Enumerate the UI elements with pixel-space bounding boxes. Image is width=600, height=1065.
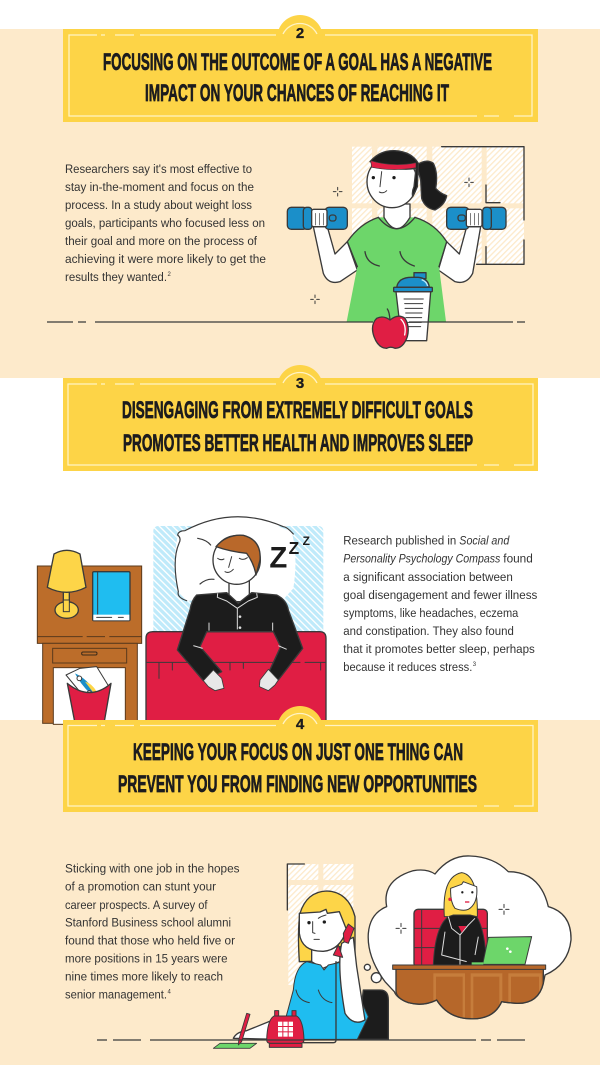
text block: section 2: their goal and more on the process of [65,234,258,248]
red executive chair [414,909,487,968]
sparkles [311,178,473,304]
right hand [466,209,482,227]
text block: section 4 [65,862,240,1002]
executive features [448,891,473,902]
phone cord [303,962,336,1043]
executive hair [444,873,477,917]
right arm [438,227,481,282]
illustration: woman on phone imagining a promotion [213,856,571,1048]
sleeping face [218,557,247,572]
blanket [146,632,326,721]
blue shirt [280,962,368,1039]
window frame [442,147,524,264]
nightstand top [37,566,142,643]
number 3: 3 [296,375,304,392]
text block: section 4: nine times more likely to reach [65,970,223,984]
executive face [451,882,477,910]
text block: section 2 [65,162,266,284]
ponytail [417,161,447,210]
illustration: woman lifting dumbbells [287,147,524,348]
executive jacket [433,915,487,965]
head [213,536,260,584]
pajama collar and details [193,593,287,649]
red telephone [267,1011,304,1047]
face [299,909,347,951]
text block: section 2: Researchers say it's most effective to [65,162,252,176]
text block: section 3: Personality Psychology Compass [343,552,500,566]
text block: section 4: 4 [168,990,172,996]
heading text [103,49,492,107]
neck [229,578,249,602]
text block: section 3: Social and [459,534,510,548]
text block: section 4: found that those who held five or [65,934,235,948]
neck [312,947,340,968]
laptop [472,937,532,965]
text block: section 4: career prospects. A survey of [65,898,208,912]
writing arm [233,1017,279,1039]
text block: section 2: process. In a study about weight loss [65,198,252,212]
text block: section 3: and constipation. They also found [343,624,514,638]
banner: heading 2 [63,15,538,122]
face [372,172,396,193]
green note [213,1043,257,1048]
text block: section 4: of a promotion can stunt your [65,880,216,894]
lamp [47,550,86,618]
apple [372,309,408,348]
text block: section 3: that it promotes better sleep, perhaps [343,642,535,656]
hands [203,670,224,691]
zzz: Z [269,541,287,574]
facial features [307,915,326,939]
text block: section 4: senior management. [65,988,167,1002]
text block: section 3: 3 [473,662,477,668]
desk [396,969,543,1023]
brown hair [216,535,260,575]
shaker bottle [394,273,432,341]
left arm [313,227,357,282]
background: cream section 2 [0,29,600,378]
pillow [175,519,295,601]
red bucket [67,683,111,723]
heading text [118,739,477,798]
head [367,156,417,208]
pen [238,1013,250,1045]
background: cream section 4 [0,720,600,1065]
green shirt [347,217,447,322]
illustration: man sleeping beside nightstand [37,517,326,724]
neck [384,204,410,229]
raised arm [340,937,365,1022]
desk side and cloud outline [396,969,543,1019]
number 2: 2 [296,25,304,42]
text block: section 2: 2 [168,272,172,278]
banner: heading 4 [63,706,538,812]
heading text [122,397,473,457]
number 4: 4 [296,716,305,733]
text block: section 3: symptoms, like headaches, eczema [343,606,518,620]
text block: section 3: found [503,552,533,566]
text block: section 3: Research published in [343,534,456,548]
text block: section 3: because it reduces stress. [343,660,472,674]
executive collar [442,917,478,965]
sparkles in cloud [396,904,509,933]
pajama buttons [239,615,241,629]
office chair [357,990,388,1039]
floor line: section 2 [47,321,525,323]
text block: section 3: goal disengagement and fewer illness [343,588,537,602]
text block: section 4: Sticking with one job in the hopes [65,862,240,876]
nightstand base [43,643,137,724]
zzz: Z [303,534,310,548]
window frame [287,864,304,910]
black pajamas [177,593,303,681]
text block: section 4: more positions in 15 years were [65,952,228,966]
hair back [298,891,355,962]
headband [371,161,416,170]
zzz [269,534,310,574]
hatched blue wall [153,526,323,636]
text block: section 3 [343,534,537,674]
paper in bucket [66,667,110,700]
blue book [93,572,130,621]
blanket fold [146,662,326,678]
left dumbbell [287,207,347,229]
zzz: Z [289,538,300,558]
desk top [393,965,546,969]
text block: section 3: a significant association between [343,570,513,584]
thought cloud [368,856,571,1019]
right dumbbell [447,207,506,229]
text block: section 4: Stanford Business school alumni [65,916,231,930]
text block: section 2: achieving it were more likely to get the [65,252,266,266]
banner: heading 3 [63,365,538,471]
phone handset [333,924,354,957]
thought bubble dots [364,964,381,983]
text block: section 2: stay in-the-moment and focus on the [65,180,254,194]
window panes [288,864,353,985]
window panes [352,147,524,264]
floor line: section 4 [97,1039,525,1041]
text block: section 2: goals, participants who focused less on [65,216,265,230]
left hand [312,209,327,227]
hair [370,151,418,197]
text block: section 2: results they wanted. [65,270,167,284]
